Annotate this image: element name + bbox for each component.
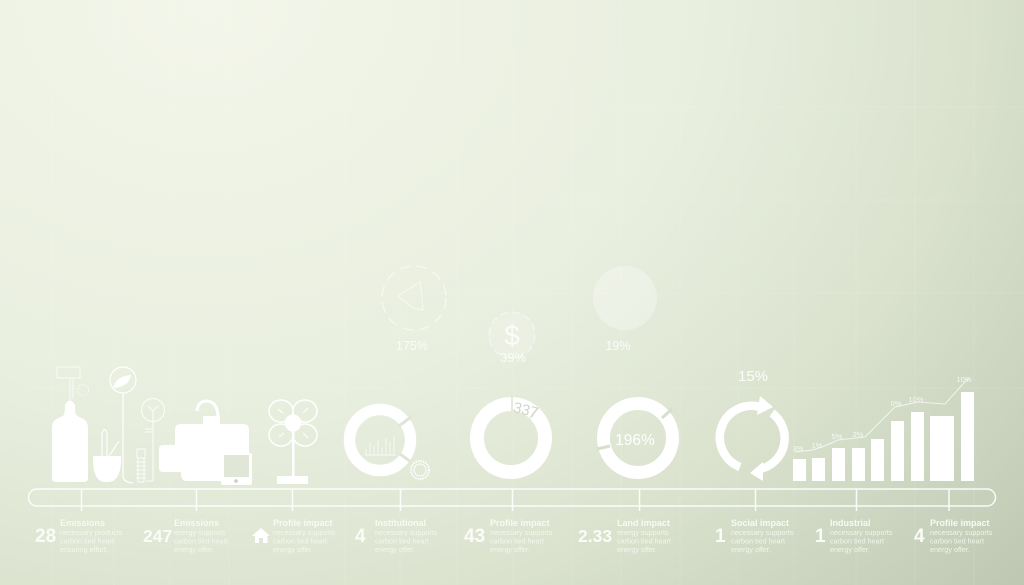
stat: 28 emissions [35, 518, 123, 554]
stat: 43 profile impact: energy offer. [490, 545, 530, 554]
stat: 43 profile impact [464, 518, 553, 554]
stat: 4 profile impact [914, 518, 993, 554]
icon: dollar circle: $ [504, 320, 520, 351]
stat: 2.33 land impact: Land impact [617, 518, 670, 528]
icon: small tree and spring [136, 398, 164, 482]
icon: bottle [52, 367, 88, 482]
stat: 2.33 land impact: energy supports [617, 528, 669, 537]
stat: 28 emissions: Emissions [60, 518, 105, 528]
chart: bars with trend line: 5% [832, 432, 843, 441]
stat: 1 social impact [715, 518, 794, 554]
stat: 1 social impact: necessary supports [731, 528, 794, 537]
stat: 4 institutional [355, 518, 438, 554]
percent label: 15%: 15% [738, 368, 768, 385]
chart: bars with trend line: 10% [908, 395, 924, 404]
chart: donut 33% [477, 396, 545, 472]
stat: 4 profile impact: Profile impact [930, 518, 990, 528]
stat: 4 institutional: carbon tied heart [375, 536, 429, 546]
chart: donut 19%: 196% [615, 432, 655, 449]
percent label: 19%: 19% [605, 339, 631, 353]
stat: home profile impact: carbon tied heart [273, 536, 327, 546]
stat: 247 emissions: Emissions [174, 518, 219, 528]
timeline [28, 489, 996, 511]
stat: home profile impact: necessary supports [273, 528, 336, 537]
stat: 28 emissions: necessary products [60, 528, 123, 537]
stat: 28 emissions: carbon tied heart [60, 536, 114, 546]
percent label: 175%: 175% [396, 339, 428, 353]
chart: donut with mini bars [350, 410, 411, 470]
stat: 4 profile impact: 4 [914, 526, 925, 547]
stat: 43 profile impact: Profile impact [490, 518, 550, 528]
stat: 4 profile impact: energy offer. [930, 545, 970, 554]
stat: 4 institutional: necessary supports [375, 528, 438, 537]
stat: 247 emissions: 247 [143, 526, 172, 546]
percent label: 39%: 39% [500, 350, 526, 365]
stat: 1 social impact: energy offer. [731, 545, 771, 554]
stat: 1 industrial: energy offer. [830, 545, 870, 554]
stat: 43 profile impact: 43 [464, 526, 485, 547]
stat: 28 emissions: ensuring effort. [60, 545, 108, 554]
stat: 1 industrial: 1 [815, 526, 826, 547]
chart: donut 19% [597, 404, 672, 472]
stat: 1 social impact: carbon tied heart [731, 536, 785, 546]
icon: dollar circle [489, 312, 535, 358]
icon: flower fan [269, 400, 317, 484]
stat: 4 profile impact: necessary supports [930, 528, 993, 537]
stat: home profile impact [252, 518, 336, 554]
stat: 2.33 land impact: energy offer. [617, 545, 657, 554]
stat: 4 profile impact: carbon tied heart [930, 536, 984, 546]
stat: 2.33 land impact: carbon tied heart [617, 536, 671, 546]
stat: home profile impact: Profile impact [273, 518, 333, 528]
stat: 1 industrial [815, 518, 893, 554]
chart: bars with trend line: 3% [793, 444, 804, 453]
stat: 4 institutional: energy offer. [375, 545, 415, 554]
stat: 1 industrial: carbon tied heart [830, 536, 884, 546]
chart: donut 33%: 337 [511, 399, 540, 422]
stat: 247 emissions [143, 518, 228, 554]
stat: home profile impact: energy offer. [273, 545, 313, 554]
icon: machine with faucet [159, 401, 252, 485]
chart: bars with trend line: 0% [891, 399, 902, 408]
stat: 247 emissions: energy offer. [174, 545, 214, 554]
stat: 1 social impact: Social impact [731, 518, 789, 528]
chart: bars with trend line: 2% [853, 430, 864, 439]
icon: circular arrows [720, 396, 785, 481]
stat: 247 emissions: energy supports [174, 528, 226, 537]
stat: 247 emissions: carbon tied heart [174, 536, 228, 546]
stat: 1 industrial: Industrial [830, 518, 871, 528]
stat: 1 industrial: necessary supports [830, 528, 893, 537]
icon: pale filled circle [593, 266, 657, 330]
stat: 4 institutional: Institutional [375, 518, 426, 528]
icon: gear [411, 461, 429, 479]
icon: potted plant [93, 430, 121, 482]
stat: 43 profile impact: carbon tied heart [490, 536, 544, 546]
stat: 43 profile impact: necessary supports [490, 528, 553, 537]
stat: 2.33 land impact: 2.33 [578, 526, 612, 546]
stat: 1 social impact: 1 [715, 526, 726, 547]
chart: bars with trend line: 1% [812, 441, 823, 450]
stat: 4 institutional: 4 [355, 526, 366, 547]
icon: leaf on stem [110, 367, 136, 483]
chart: bars with trend line [793, 375, 974, 481]
icon: dashed circle with leaf outline [382, 266, 446, 330]
chart: bars with trend line: 10% [956, 375, 972, 384]
stat: 28 emissions: 28 [35, 526, 56, 547]
stat: 2.33 land impact [578, 518, 671, 554]
